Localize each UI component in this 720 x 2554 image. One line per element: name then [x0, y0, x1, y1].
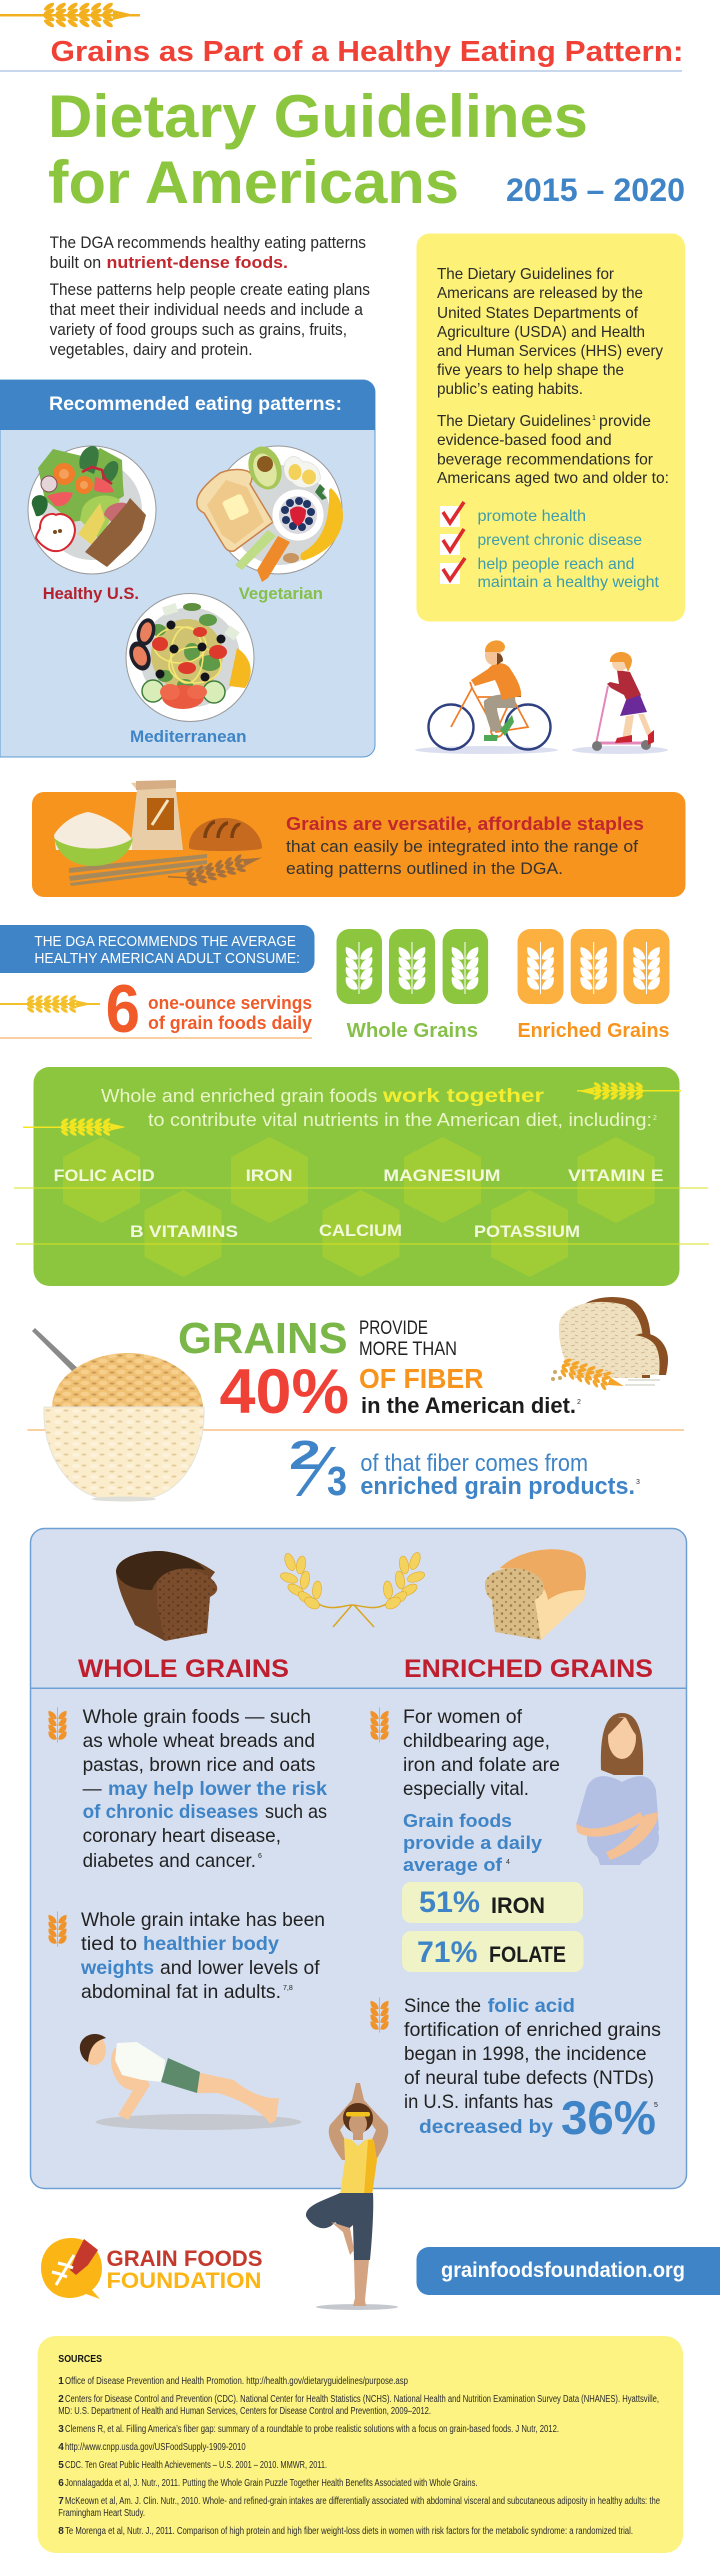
title: grains as part of a healthy eating pattern: Grains as Part of a Healthy Eating Pattern:: [50, 36, 684, 68]
logo: grain foods foundation: [41, 2238, 262, 2299]
heading: enriched grains: ENRICHED GRAINS: [404, 1655, 653, 1683]
checklist: promote health: [478, 508, 586, 525]
text block: healthier body weights: Whole grain intake has been: [81, 1909, 325, 1931]
header wheat: [0, 1, 140, 29]
text block: healthier body weights: 7,8: [283, 1985, 293, 1992]
text block: daily average: Grain foods: [403, 1811, 512, 1831]
website banner: grainfoodsfoundation.org: [441, 2259, 685, 2282]
fiber stat: 40%: [178, 1314, 581, 1427]
stat: folate: [402, 1931, 584, 1972]
text block: about the guidelines: Agriculture (USDA) and Health: [437, 324, 645, 341]
fiber stat: two thirds: 3: [636, 1479, 640, 1486]
text block: women of childbearing age: [403, 1706, 560, 1800]
text block: about the guidelines: 1: [592, 415, 596, 422]
text block: about the guidelines: The Dietary Guidelines: [437, 413, 591, 430]
text block: about the guidelines: five years to help shape the: [437, 362, 624, 379]
source list: CDC. Ten Great Public Health Achievements – U.S. 2001 – 2010. MMWR, 2011.: [65, 2460, 327, 2471]
text block: daily average: provide a daily: [403, 1833, 542, 1853]
text block: DGA intro: vegetables, dairy and protein.: [50, 341, 252, 359]
checklist: maintain a healthy weight: [478, 574, 660, 591]
panel text: Whole and enriched grain foods: [101, 1085, 377, 1106]
plate: vegetarian: [197, 442, 343, 582]
text block: DGA intro: The DGA recommends healthy eating patterns: [50, 234, 366, 252]
text block: healthier body weights: tied to: [81, 1933, 137, 1955]
six servings stat: one-ounce servings: [148, 993, 312, 1013]
text block: women of childbearing age: childbearing age,: [403, 1730, 550, 1752]
hexagons: [63, 1137, 654, 1277]
website banner: [416, 2247, 720, 2295]
text block: daily average: [403, 1811, 542, 1875]
stat: iron: IRON: [491, 1893, 545, 1918]
whole grain servings tiles: [336, 929, 488, 1042]
nutrient labels: [54, 1166, 663, 1241]
illustration: cereal bowl: [32, 1328, 204, 1502]
illustration: girl on scooter: [572, 652, 668, 754]
source list: 7: [58, 2496, 64, 2507]
text block: whole grain foods: Whole grain foods — such: [83, 1706, 311, 1728]
text block: healthier body weights: and lower levels of: [160, 1957, 320, 1979]
panel: whole vs enriched grains: [30, 1528, 686, 2188]
panel: versatile staples: [32, 780, 686, 897]
nutrient labels: IRON: [246, 1166, 292, 1185]
nutrient labels: MAGNESIUM: [383, 1166, 500, 1185]
date range: 2015 – 2020: [506, 172, 685, 208]
fiber stat: two thirds: of that fiber comes from: [360, 1450, 588, 1477]
fiber stat: 40%: GRAINS: [178, 1314, 348, 1363]
text block: about the guidelines: provide: [599, 413, 651, 430]
nutrient labels: FOLIC ACID: [54, 1166, 155, 1185]
fiber stat: 40%: 2: [577, 1399, 581, 1406]
text block: whole grain foods: —: [83, 1778, 102, 1800]
source list: 4: [58, 2442, 64, 2453]
panel heading: Recommended eating patterns:: [49, 393, 342, 415]
enriched grain servings tiles: Enriched Grains: [518, 1020, 669, 1042]
fiber stat: two thirds: enriched grain products.: [360, 1473, 635, 1500]
enriched grain servings tiles: [518, 929, 670, 1042]
text block: about the guidelines: [437, 266, 669, 487]
source list: 8: [58, 2526, 64, 2537]
text block: DGA intro: built on: [50, 254, 101, 272]
text block: about the guidelines: United States Departments of: [437, 305, 639, 322]
label: vegetarian: Vegetarian: [239, 584, 323, 603]
stat: folate: 71%: [417, 1936, 478, 1969]
text block: DGA intro: [50, 234, 370, 359]
panel text: to contribute vital nutrients in the American diet, including:: [148, 1109, 652, 1130]
text block: DGA intro: These patterns help people create eating plans: [50, 281, 370, 299]
text block: whole grain foods: as whole wheat breads and: [83, 1730, 315, 1752]
illustration: yoga woman: [306, 2083, 398, 2310]
six servings stat: of grain foods daily: [148, 1013, 312, 1033]
text block: women of childbearing age: iron and folate are: [403, 1754, 560, 1776]
text block: folic acid fortification: 36%: [561, 2091, 656, 2144]
illustration: enriched loaf: [485, 1549, 586, 1640]
text block: healthier body weights: healthier body: [143, 1933, 279, 1955]
heading: dietary guidelines for americans: Dietary Guidelines: [48, 83, 588, 150]
text block: folic acid fortification: decreased by: [419, 2116, 553, 2138]
source list: Framingham Heart Study.: [58, 2508, 145, 2519]
fiber stat: 40%: OF FIBER: [359, 1363, 484, 1394]
banner: DGA recommends: [0, 925, 314, 973]
fiber stat: two thirds: 2: [289, 1432, 321, 1478]
panel: nutrients: [14, 1067, 709, 1286]
source list: 2: [58, 2394, 64, 2405]
source list: http://www.cnpp.usda.gov/USFoodSupply-1909-2010: [65, 2442, 246, 2453]
heading: dietary guidelines for americans: for Americans: [48, 149, 459, 216]
text block: folic acid fortification: of neural tube defects (NTDs): [404, 2067, 654, 2089]
illustration: push-up man: [80, 2034, 302, 2130]
text block: about the guidelines: Americans aged two and older to:: [437, 470, 669, 487]
text block: daily average: 4: [506, 1859, 510, 1866]
callout text: eating patterns outlined in the DGA.: [286, 859, 563, 878]
text block: folic acid fortification: began in 1998, the incidence: [404, 2043, 646, 2065]
source list: Jonnalagadda et al, J. Nutr., 2011. Putting the Whole Grain Puzzle Together Health Benefits Associated with Whole Grains.: [65, 2478, 478, 2489]
source list: 6: [58, 2478, 64, 2489]
text block: about the guidelines: Americans are released by the: [437, 285, 643, 302]
source list: 1: [58, 2376, 64, 2387]
text block: healthier body weights: [80, 1909, 325, 2003]
panel: sources: [38, 2336, 683, 2553]
panel: recommended eating patterns: [0, 380, 375, 757]
illustration: staples: [54, 780, 265, 889]
text block: DGA intro: that meet their individual needs and include a: [50, 301, 364, 319]
source list: Clemens R, et al. Filling America’s fiber gap: summary of a roundtable to probe realistic solutions with a focus on grain-based foods. J Nutr, 2012.: [65, 2424, 559, 2435]
text block: whole grain foods: coronary heart disease,: [83, 1825, 281, 1847]
text block: DGA intro: nutrient-dense foods.: [106, 254, 288, 272]
sources heading: SOURCES: [58, 2353, 102, 2365]
label: mediterranean: Mediterranean: [130, 727, 246, 746]
illustration: whole grain loaf: [116, 1551, 217, 1641]
stat: iron: 51%: [419, 1886, 480, 1919]
checklist: prevent chronic disease: [478, 532, 642, 549]
text block: folic acid fortification: fortification of enriched grains: [404, 2019, 661, 2041]
text block: women of childbearing age: especially vital.: [403, 1778, 529, 1800]
six servings stat: [0, 971, 312, 1047]
callout text: Grains are versatile, affordable staples: [286, 813, 644, 834]
plate: mediterranean: [125, 594, 254, 722]
wheat accents: [23, 1081, 681, 1137]
illustration: cyclist: [415, 640, 558, 754]
icon: wheat bullet 1: [48, 1707, 67, 1743]
nutrient labels: CALCIUM: [319, 1221, 402, 1240]
panel text: [101, 1085, 657, 1130]
fiber stat: 40%: PROVIDE: [359, 1318, 428, 1339]
panel: dietary guidelines explainer: [416, 234, 685, 622]
label: healthy U.S.: Healthy U.S.: [43, 584, 139, 603]
callout text: that can easily be integrated into the range of: [286, 837, 638, 856]
six servings stat: 6: [106, 971, 140, 1047]
icon: wheat bullet 3: [370, 1707, 389, 1743]
text block: about the guidelines: public’s eating habits.: [437, 381, 583, 398]
text block: about the guidelines: beverage recommendations for: [437, 451, 654, 468]
text block: folic acid fortification: [404, 1995, 661, 2144]
text block: whole grain foods: such as: [265, 1801, 327, 1823]
fiber stat: 40%: 40%: [220, 1357, 349, 1427]
stat: folate: FOLATE: [489, 1942, 566, 1967]
heading: dietary guidelines for americans: [48, 83, 588, 216]
text block: whole grain foods: 6: [258, 1853, 262, 1860]
logo: grain foods foundation: GRAIN FOODS: [106, 2246, 262, 2271]
fiber stat: two thirds: [289, 1432, 640, 1504]
fiber stat: 40%: MORE THAN: [359, 1339, 457, 1360]
text block: whole grain foods: may help lower the risk: [108, 1778, 327, 1800]
illustration: bread and wheat: [551, 1297, 668, 1396]
illustration: pregnant woman: [576, 1713, 659, 1865]
nutrient labels: VITAMIN E: [568, 1166, 664, 1185]
text block: folic acid fortification: in U.S. infants has: [404, 2091, 553, 2113]
plate: healthy U.S.: [28, 446, 156, 574]
source list: 5: [58, 2460, 64, 2471]
panel text: work together: [382, 1085, 545, 1107]
heading: whole grains: WHOLE GRAINS: [78, 1655, 289, 1683]
stat: iron: [402, 1882, 583, 1923]
icon: wheat bullet 4: [370, 1997, 389, 2033]
text block: DGA intro: variety of food groups such as grains, fruits,: [50, 321, 347, 339]
icon: wheat bullet 2: [48, 1911, 67, 1947]
checklist: help people reach and: [478, 556, 634, 573]
text block: about the guidelines: and Human Services (HHS) every: [437, 343, 663, 360]
text block: about the guidelines: The Dietary Guidelines for: [437, 266, 615, 283]
text block: whole grain foods: pastas, brown rice and oats: [83, 1754, 316, 1776]
source list: Office of Disease Prevention and Health Promotion. http://health.gov/dietaryguidelines/purpose.asp: [65, 2376, 408, 2387]
fiber stat: 40%: in the American diet.: [361, 1393, 576, 1418]
nutrient labels: POTASSIUM: [474, 1222, 580, 1241]
source list: [58, 2376, 660, 2537]
text block: whole grain foods: of chronic diseases: [83, 1801, 259, 1823]
panel text: 2: [653, 1115, 657, 1122]
text block: healthier body weights: abdominal fat in adults.: [81, 1981, 281, 2003]
whole grain servings tiles: Whole Grains: [347, 1020, 478, 1042]
nutrient labels: B VITAMINS: [130, 1222, 238, 1241]
banner: DGA recommends: HEALTHY AMERICAN ADULT CONSUME:: [34, 951, 300, 967]
checklist: [440, 502, 660, 591]
text block: about the guidelines: evidence-based food and: [437, 432, 612, 449]
text block: women of childbearing age: For women of: [403, 1706, 523, 1728]
callout text: [286, 813, 644, 878]
text block: whole grain foods: [83, 1706, 327, 1872]
illustration: wheat wreath: [279, 1551, 426, 1627]
fiber stat: two thirds: 3: [327, 1458, 347, 1504]
source list: 3: [58, 2424, 64, 2435]
text block: folic acid fortification: Since the: [404, 1995, 481, 2017]
source list: MD: U.S. Department of Health and Human Services, Centers for Disease Control and Prevention, 2009–2012.: [58, 2406, 431, 2417]
logo: grain foods foundation: FOUNDATION: [106, 2268, 262, 2293]
text block: whole grain foods: diabetes and cancer.: [83, 1850, 256, 1872]
text block: folic acid fortification: folic acid: [488, 1995, 575, 2017]
text block: folic acid fortification: 5: [654, 2102, 658, 2109]
text block: daily average: average of: [403, 1855, 503, 1875]
text block: healthier body weights: weights: [80, 1957, 154, 1979]
logo mark: [41, 2238, 102, 2299]
banner: DGA recommends: THE DGA RECOMMENDS THE AVERAGE: [34, 934, 296, 950]
